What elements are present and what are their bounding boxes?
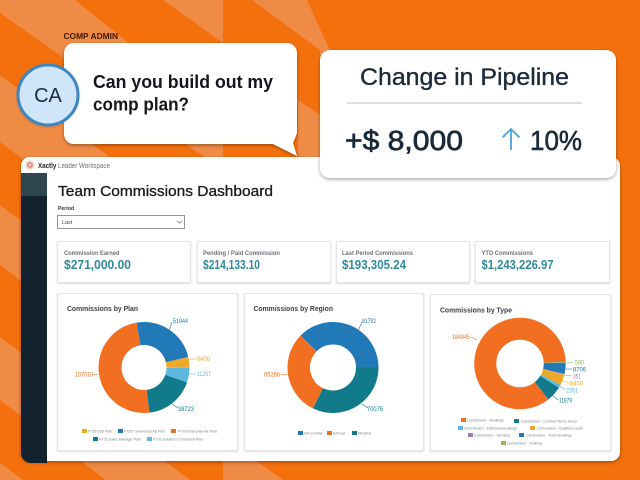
period filter <box>58 206 184 228</box>
KPI: pending / paid commission: Pending / Paid Commission <box>203 250 280 257</box>
value labels: 8706 <box>573 366 586 374</box>
panel: commissions by region <box>244 294 424 450</box>
KPI: YTD commissions: YTD Commissions <box>482 250 534 257</box>
legend: Commission - Individual Bookings <box>464 426 517 430</box>
legend: Commission - Services <box>474 432 510 438</box>
question text: comp plan? <box>93 94 189 114</box>
value labels: 81792 <box>362 318 376 325</box>
value labels <box>75 318 211 413</box>
value labels: 65268 <box>264 372 280 378</box>
donut chart <box>101 324 187 411</box>
question text: Can you build out my <box>93 71 274 92</box>
period filter: Last <box>62 220 73 226</box>
KPI: last period commissions: Last Period Commissions <box>342 250 414 257</box>
value labels: 184945 <box>452 334 470 341</box>
donut chart <box>471 315 569 412</box>
percent value: 10% <box>530 125 582 156</box>
legend: Commission - Contract Terms Areas <box>521 418 577 424</box>
value labels: 11879 <box>559 398 572 404</box>
legend: Commission - Qualified Leads <box>537 426 583 430</box>
donut chart <box>285 319 381 416</box>
period filter: Period <box>58 206 74 212</box>
legend: Commission - Training <box>507 440 542 446</box>
heading: Commissions by Plan <box>67 304 138 313</box>
avatar: CA <box>18 65 78 125</box>
value labels: 11257 <box>197 371 211 378</box>
legend: FY26 Solutions Consultant Plan <box>153 436 203 442</box>
value labels: 8400 <box>197 356 210 363</box>
value labels: 8400 <box>570 380 583 388</box>
value labels: 2351 <box>566 388 578 394</box>
sidebar <box>21 173 47 463</box>
KPI: last period commissions: $193,305.24 <box>342 258 406 272</box>
value labels: 351 <box>573 374 581 380</box>
KPI: pending / paid commission <box>198 242 330 282</box>
question text <box>93 71 274 114</box>
KPI: YTD commissions: $1,243,226.97 <box>482 258 554 272</box>
dashboard window <box>21 157 620 463</box>
legend: FY26 Sales Manager Plan <box>99 436 141 442</box>
value labels <box>452 334 586 404</box>
legend: NA West <box>358 430 372 436</box>
value labels: 51944 <box>173 318 188 325</box>
window frame <box>21 157 620 461</box>
header title: Xactly Leader Workspace <box>38 163 110 170</box>
panel: commissions by type <box>430 294 610 450</box>
KPI: YTD commissions <box>476 242 610 282</box>
legend: NA Central <box>304 430 322 436</box>
card heading: Change in Pipeline <box>360 64 569 91</box>
legend: FY26 Commercial AE Plan <box>124 428 165 434</box>
dashboard heading: Team Commissions Dashboard <box>58 184 273 200</box>
legend: Commission - Bookings <box>467 418 504 422</box>
speech bubble <box>64 43 297 156</box>
value labels: 107010 <box>75 372 93 378</box>
value labels: 38723 <box>178 406 194 413</box>
value labels: 580 <box>575 360 584 366</box>
icon: Xactly logo <box>26 160 34 170</box>
KPI: last period commissions <box>336 242 470 282</box>
value labels <box>264 318 383 413</box>
legend: Commission - Team Bookings <box>526 432 572 438</box>
label: comp admin: COMP ADMIN <box>64 31 118 41</box>
legend: FY26 B2B Plan <box>88 428 112 434</box>
heading: Commissions by Type <box>440 306 512 314</box>
legend <box>458 418 583 446</box>
legend: NA East <box>333 430 346 436</box>
KPI: pending / paid commission: $214,133.10 <box>203 258 260 272</box>
panel: commissions by plan <box>58 294 238 450</box>
legend <box>82 428 217 442</box>
legend <box>298 430 372 436</box>
icon: up arrow <box>502 129 520 150</box>
legend: FY26 Enterprise AE Plan <box>178 428 217 434</box>
dollar value: +$ 8,000 <box>345 125 463 156</box>
value labels: 70075 <box>367 406 383 413</box>
KPI: commission earned: $271,000.00 <box>64 258 131 272</box>
KPI: commission earned <box>58 242 190 282</box>
KPI: commission earned: Commission Earned <box>64 250 120 257</box>
avatar: CA: CA <box>34 85 63 107</box>
window header <box>26 160 110 170</box>
card: change in pipeline <box>320 50 616 178</box>
heading: Commissions by Region <box>254 304 333 313</box>
